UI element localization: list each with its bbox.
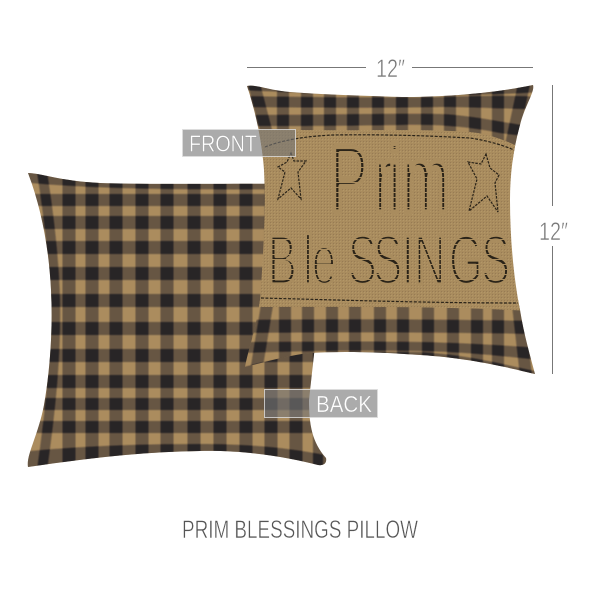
label: BACK: BACK: [316, 391, 373, 417]
stitched word Blessings: BleSSINGS: [268, 221, 510, 300]
burlap panel: [250, 129, 530, 311]
stitched star left: [278, 153, 306, 199]
stitched word Prim: Prim: [330, 126, 449, 233]
label: FRONT: FRONT: [189, 130, 257, 156]
stitched star right: [468, 154, 499, 212]
stitched line bottom: [261, 298, 518, 303]
label: BACK: [264, 390, 378, 418]
back pillow: [20, 165, 330, 475]
dimension: width 12 in: 12″: [376, 55, 405, 83]
stitched line top: [265, 135, 514, 150]
infographic: [28, 59, 568, 538]
bottom checked band: [245, 300, 535, 374]
dimension: height 12 in: 12″: [539, 218, 568, 246]
label: FRONT: [182, 130, 296, 156]
top checked band: [247, 85, 534, 160]
title: PRIM BLESSINGS PILLOW: [182, 516, 418, 544]
front pillow: [240, 80, 540, 385]
